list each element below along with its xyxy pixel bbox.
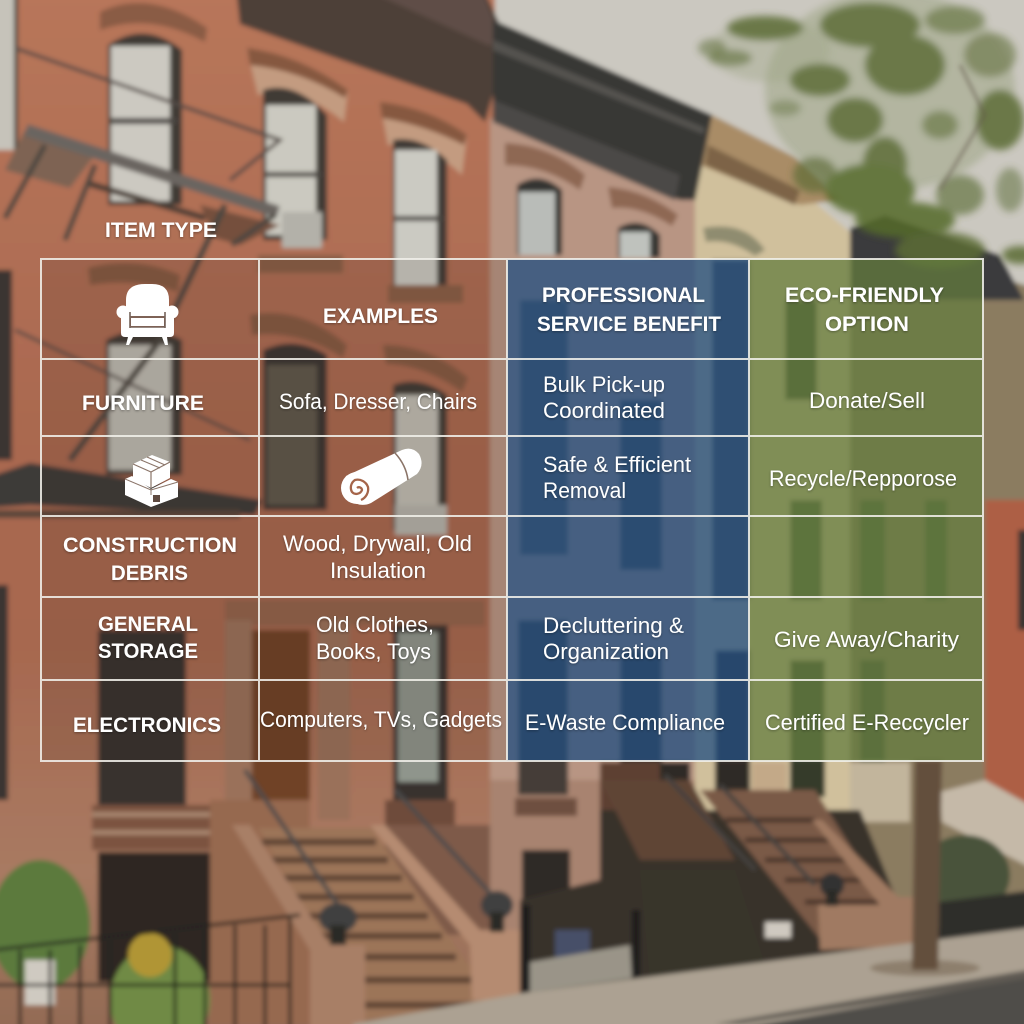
second floor windows xyxy=(250,313,347,358)
row: construction debris: Wood, Drywall, Old xyxy=(283,531,472,556)
icon: insulation roll xyxy=(341,449,422,505)
row: safe removal & recycle xyxy=(543,452,957,503)
heading: examples: EXAMPLES xyxy=(323,304,438,328)
heading: professional service benefit: SERVICE BENEFIT xyxy=(537,312,721,336)
trunk xyxy=(912,760,942,970)
table grid xyxy=(41,259,983,761)
row: general storage: Old Clothes, xyxy=(316,612,434,637)
panel: left column tint xyxy=(41,259,507,761)
icon: stacked boxes xyxy=(125,455,178,507)
building 2 mauve xyxy=(490,118,700,1024)
row: furniture: Donate/Sell xyxy=(809,388,925,413)
row: general storage xyxy=(98,612,959,664)
building 3 windows xyxy=(703,226,765,256)
row: furniture: Coordinated xyxy=(543,398,665,423)
building 3 beige xyxy=(695,115,850,1024)
row: general storage: STORAGE xyxy=(98,639,198,663)
heading: eco-friendly option: ECO-FRIENDLY xyxy=(785,283,944,307)
panel: eco-friendly option column tint xyxy=(749,259,983,761)
row: safe removal & recycle: Safe & Efficient xyxy=(543,452,691,477)
row: furniture: FURNITURE xyxy=(82,391,204,415)
foliage & iron fence xyxy=(0,860,90,990)
window lintels & windows building 1 xyxy=(100,3,207,42)
right stoop xyxy=(940,780,1024,890)
row: electronics: Computers, TVs, Gadgets xyxy=(260,707,502,732)
row: construction debris: CONSTRUCTION xyxy=(63,533,237,557)
building 2 cornice xyxy=(493,20,712,200)
heading: item type: ITEM TYPE xyxy=(105,218,217,242)
row: construction debris: Insulation xyxy=(330,558,426,583)
row: furniture: Bulk Pick-up xyxy=(543,372,665,397)
row: safe removal & recycle: Recycle/Repporose xyxy=(769,466,957,491)
row: furniture xyxy=(82,372,925,423)
heading: eco-friendly option xyxy=(785,283,944,336)
row: electronics: Certified E-Reccycler xyxy=(765,710,969,735)
heading: professional service benefit xyxy=(537,283,721,336)
dark courtyard & stoop 2 xyxy=(520,810,915,1000)
fire escape xyxy=(0,0,14,150)
building 4 xyxy=(850,232,1024,1024)
sidewalk & road xyxy=(353,922,1024,1024)
row: electronics: ELECTRONICS xyxy=(73,713,221,737)
stoop 1 xyxy=(258,828,497,1020)
row: general storage: Give Away/Charity xyxy=(774,627,959,652)
building 1 brick xyxy=(0,0,495,1024)
heading: professional service benefit: PROFESSIONAL xyxy=(542,283,705,307)
heading: eco-friendly option: OPTION xyxy=(825,312,909,336)
row: construction debris xyxy=(63,531,472,585)
ground floor building 1 xyxy=(225,600,485,626)
building 1 cornice xyxy=(233,0,500,122)
icon: armchair xyxy=(116,284,178,345)
row: general storage: Books, Toys xyxy=(316,639,431,664)
row: construction debris: DEBRIS xyxy=(111,561,188,585)
row: general storage: Decluttering & xyxy=(543,613,684,638)
row: general storage: Organization xyxy=(543,639,669,664)
building 2 windows xyxy=(505,143,585,190)
row: safe removal & recycle: Removal xyxy=(543,478,626,503)
panel: professional service benefit column tint xyxy=(507,259,749,761)
row: electronics xyxy=(73,707,969,737)
row: electronics: E-Waste Compliance xyxy=(525,710,725,735)
row: general storage: GENERAL xyxy=(98,612,198,636)
row: furniture: Sofa, Dresser, Chairs xyxy=(279,389,477,414)
background: tree canopy xyxy=(698,0,1024,268)
